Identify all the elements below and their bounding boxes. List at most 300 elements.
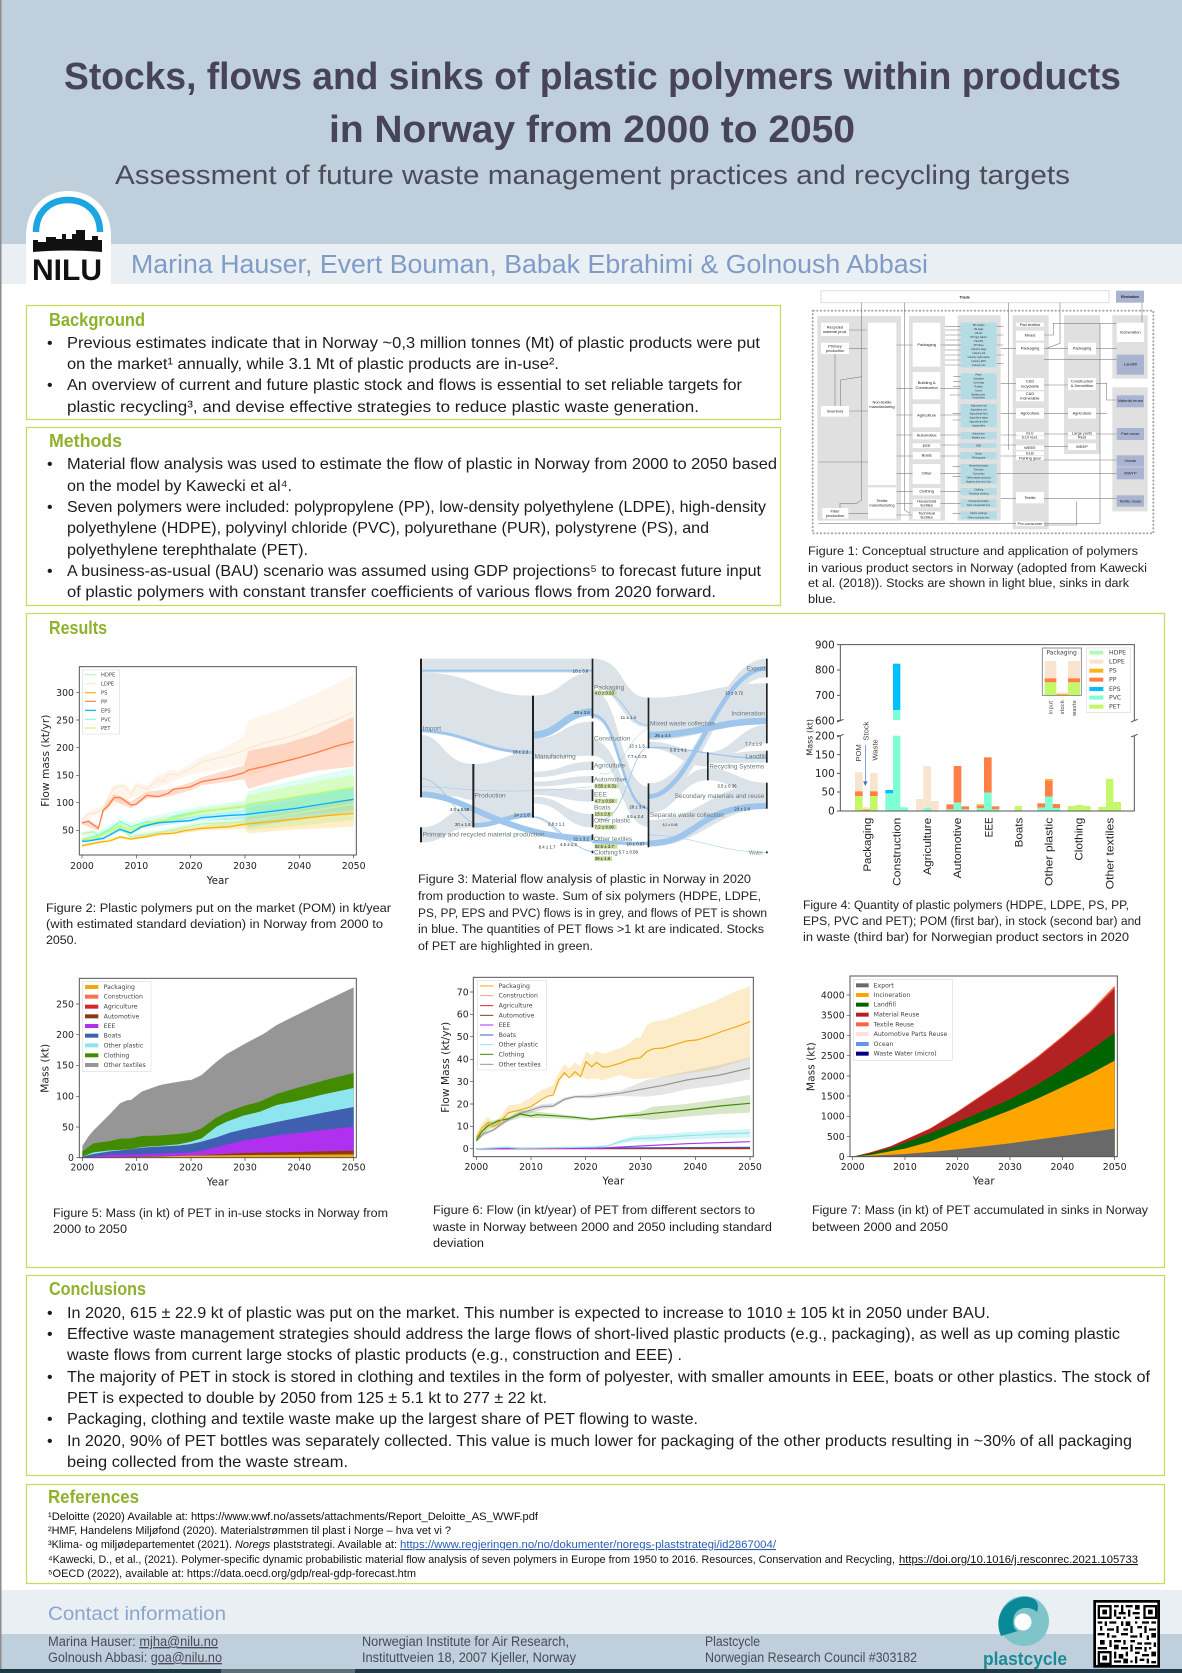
authors: Marina Hauser, Evert Bouman, Babak Ebrahimi & Golnoush Abbasi (131, 251, 928, 279)
chart: figure 2 polymer flow lines: 50 (62, 826, 74, 837)
icon: QR code (1093, 1600, 1160, 1668)
caption: figure 5 (53, 1206, 388, 1236)
heading: references: References (48, 1486, 139, 1507)
figure 1: conceptual structure diagram: Mixed (1025, 333, 1035, 338)
sector axis labels: Construction (892, 818, 904, 886)
sector axis labels: Packaging (862, 818, 874, 872)
figure 1: conceptual structure diagram: Industry foil (972, 352, 985, 355)
chart: figure 2 polymer flow lines: 200 (56, 743, 74, 754)
text block: conclusions bullets: Effective waste management strategies should address the large flows of short-lived plastic products (e.g., packaging), as well as up coming plastic (67, 1326, 1120, 1343)
text block: methods bullets: polyethylene terephthalate (PET). (67, 542, 308, 559)
text block: reference list: ¹Deloitte (2020) Available at: https://www.wwf.no/assets/attachments/Report_Deloitte_AS_WWF.pdf (48, 1511, 539, 1523)
figure 1: conceptual structure diagram: Agrotextiles (972, 425, 986, 428)
legend: figure 4: PET (1109, 704, 1121, 711)
chart: figure 3 sankey diagram: Construction (594, 736, 631, 743)
caption: figure 1: in various product sectors in Norway (adopted from Kawecki (808, 561, 1147, 575)
inset: packaging bars: input (1049, 701, 1055, 714)
chart: figure 5 stacked area: Year (206, 1176, 229, 1188)
chart: figure 4 bar chart: 600 (815, 715, 835, 727)
heading: conclusions: Conclusions (49, 1278, 146, 1299)
figure 1: conceptual structure diagram: PP textiles (973, 324, 985, 327)
annotation: POM, stock and waste bars: POM (854, 744, 863, 762)
chart: figure 5 stacked area: 100 (56, 1092, 74, 1103)
legend: figure 2: PET (101, 726, 111, 732)
figure 1: conceptual structure diagram: Building & (918, 380, 936, 385)
chart: figure 3 sankey diagram: 7.7 ± 1.9 (745, 741, 762, 746)
figure 1: conceptual structure diagram: Geotextiles (972, 397, 986, 400)
text block: institute address: Norwegian Institute for Air Research, (362, 1634, 569, 1649)
chart: figure 6 PET waste flows: 2020 (574, 1162, 598, 1173)
legend: figure 4: EPS (1109, 686, 1121, 693)
caption: figure 5: Figure 5: Mass (in kt) of PET in in-use stocks in Norway from (53, 1206, 388, 1220)
legend: figure 7: Export (874, 982, 894, 989)
figure 1: conceptual structure diagram: textiles (920, 514, 933, 519)
chart: figure 3 sankey diagram: 20 ± 1.8 (455, 822, 471, 827)
chart: figure 3 sankey diagram: Water (749, 850, 763, 856)
chart: figure 7 PET sinks stacked area: 1500 (821, 1091, 845, 1102)
figure 1: conceptual structure diagram: Incineration (1120, 330, 1141, 335)
figure 1: conceptual structure diagram: Packaging (1073, 346, 1091, 351)
text block: reference list: ³Klima- og miljødepartementet (2021). Noregs plaststrategi. Available at: (48, 1539, 397, 1551)
chart: figure 3 sankey diagram: 4.7 ± 0.58 (595, 799, 614, 804)
chart: figure 4 bar chart: 100 (815, 768, 835, 780)
text block: methods bullets: of plastic polymers with constant transfer coefficients of various flows from 2020 forward. (67, 584, 716, 601)
chart: figure 6 PET waste flows: 60 (457, 1010, 469, 1021)
chart: figure 6 PET waste flows (439, 977, 762, 1187)
legend: figure 6: Automotive (499, 1012, 534, 1019)
chart: figure 7 PET sinks stacked area (804, 976, 1127, 1187)
chart: figure 3 sankey diagram: 4.5 ± 2.4 (627, 814, 644, 819)
panel: background (26, 306, 780, 420)
panel: conclusions (26, 1276, 1164, 1476)
text block: methods bullets: • (47, 499, 53, 516)
text block: methods bullets: • (47, 456, 53, 473)
figure 1: conceptual structure diagram: Household textiles (969, 500, 990, 503)
caption: figure 6 (432, 1203, 772, 1250)
chart: figure 3 sankey diagram: Manufacturing (535, 754, 576, 761)
sector axis labels: Agriculture (922, 818, 934, 875)
figure 1: conceptual structure diagram: Other technical text. (968, 516, 990, 519)
chart: figure 3 sankey diagram: Recycling Systems (709, 764, 765, 771)
chart: figure 7 PET sinks stacked area: 0 (839, 1152, 845, 1163)
text block: reference list: ⁵OECD (2022), available at: https://data.oecd.org/gdp/real-gdp-forecast.htm (48, 1568, 416, 1580)
caption: figure 6: deviation (433, 1236, 484, 1250)
legend: figure 2: PS (101, 691, 107, 697)
figure 1: conceptual structure diagram: Cosmetics (973, 473, 985, 476)
text block: conclusions bullets: • (47, 1369, 53, 1386)
caption: figure 1 (808, 544, 1147, 606)
title (64, 56, 1121, 151)
chart: figure 2 polymer flow lines: 2040 (287, 861, 311, 872)
chart: figure 3 sankey diagram: 24 ± 1.8 (514, 812, 530, 817)
text block: reference list: ²HMF, Handelens Miljøfond (2020). Materialstrømmen til plast i Norge – hva vet vi ? (48, 1525, 451, 1537)
text block: background bullets (47, 335, 761, 416)
chart: figure 4 bar chart: 50 (822, 787, 835, 799)
legend: figure 7: Automotive Parts Reuse (874, 1031, 947, 1038)
chart: figure 2 polymer flow lines: 250 (56, 716, 74, 727)
figure 1: conceptual structure diagram: WEEP (1076, 444, 1088, 449)
figure 1: conceptual structure diagram: C&D (1026, 391, 1034, 396)
caption: figure 2: 2050. (46, 933, 77, 947)
text block: methods bullets: Material flow analysis was used to estimate the flow of plastic in Norway from 2000 to 2050 based (67, 456, 777, 473)
chart: figure 6 PET waste flows: 2010 (519, 1162, 543, 1173)
chart: figure 6 PET waste flows: Year (601, 1175, 625, 1187)
chart: figure 3 sankey diagram: Incineration (731, 711, 765, 718)
figure 1: conceptual structure diagram: Household (917, 499, 936, 504)
chart: figure 2 polymer flow lines: 2050 (342, 861, 366, 872)
inset: packaging bars (1042, 648, 1081, 716)
chart: figure 7 PET sinks stacked area: 2040 (1050, 1162, 1074, 1173)
text block: methods bullets: Seven polymers were included: polypropylene (PP), low-density polyethylene (LDPE), high-density (67, 499, 766, 516)
figure 1: conceptual structure diagram: EEE (976, 445, 981, 448)
chart: figure 7 PET sinks stacked area: Mass (kt) (804, 1042, 817, 1091)
chart: figure 5 stacked area: 0 (68, 1153, 74, 1164)
figure 1: conceptual structure diagram: PE bags (974, 328, 984, 331)
figure 1: conceptual structure diagram: Fishing gear (972, 457, 986, 460)
legend: figure 2: LDPE (101, 682, 114, 688)
figure 1: conceptual structure diagram: Industry mix (972, 364, 986, 367)
caption: figure 3: PS, PP, EPS and PVC) flows is in grey, and flows of PET is shown (418, 906, 767, 920)
caption: figure 3 (418, 872, 767, 953)
chart: figure 4 bar chart: 0 (828, 806, 835, 818)
legend: figure 5: Automotive (104, 1013, 139, 1020)
caption: figure 6: waste in Norway between 2000 and 2050 including standard (432, 1220, 772, 1234)
chart: figure 3 sankey diagram: 28 ± 3.4 (629, 804, 646, 809)
legend: figure 4: PS (1109, 668, 1117, 675)
figure 1: conceptual structure diagram: Construction (915, 385, 938, 390)
figure 1: conceptual structure diagram: production (826, 513, 844, 518)
figure 1: conceptual structure diagram: Packaging (917, 342, 936, 347)
figure 1: conceptual structure diagram: Non-textile (872, 399, 892, 404)
chart: figure 2 polymer flow lines (39, 667, 366, 887)
chart: figure 2 polymer flow lines: 300 (56, 688, 74, 699)
chart: figure 5 stacked area: 200 (56, 1030, 74, 1041)
text block: background bullets: An overview of current and future plastic stock and flows is essential to set reliable targets for (67, 377, 743, 394)
chart: figure 3 sankey diagram: 82.5 ± 3.7 (595, 844, 614, 849)
chart: figure 3 sankey diagram: 8.1 ± 0.45 (663, 823, 678, 827)
chart: figure 5 stacked area: 2050 (342, 1163, 366, 1174)
text block: conclusions bullets: In 2020, 90% of PET bottles was separately collected. This value is much lower for packaging of the other products resulting in ~30% of all packaging (67, 1433, 1132, 1450)
chart: figure 6 PET waste flows: 40 (457, 1055, 469, 1066)
chart: figure 6 PET waste flows: 30 (457, 1077, 469, 1088)
figure 1: conceptual structure diagram: textiles (920, 502, 933, 507)
title: Stocks, flows and sinks of plastic polymers within products (64, 56, 1121, 98)
chart: figure 6 PET waste flows: 70 (457, 987, 469, 998)
figure 1: conceptual structure diagram: Industry bags (971, 348, 987, 351)
icon: plastcycle logo (983, 1596, 1067, 1669)
caption: figure 7: between 2000 and 2050 (812, 1220, 948, 1234)
caption: figure 7 (812, 1203, 1149, 1234)
figure 1: conceptual structure diagram: Rest (1078, 435, 1087, 440)
text block: institute address: Instituttveien 18, 2007 Kjeller, Norway (362, 1650, 576, 1665)
text block: conclusions bullets: • (47, 1326, 53, 1343)
chart: figure 4 bar chart: 800 (815, 665, 835, 677)
chart: figure 5 stacked area: 2030 (233, 1163, 257, 1174)
legend: figure 5: EEE (104, 1023, 115, 1030)
legend: figure 6: Other textiles (499, 1061, 541, 1068)
figure 1: conceptual structure diagram: Large parts (1072, 431, 1092, 436)
chart: figure 6 PET waste flows: 50 (457, 1032, 469, 1043)
chart: figure 3 sankey diagram: Other plastic (594, 817, 631, 824)
text block: conclusions bullets: • (47, 1305, 53, 1322)
legend: figure 7: Waste Water (micro) (874, 1051, 937, 1058)
legend: figure 5: Boats (104, 1033, 121, 1040)
legend: figure 5: Clothing (104, 1052, 129, 1059)
chart: figure 3 sankey diagram: 21 ± 3.2 (573, 836, 590, 841)
panel: references (26, 1484, 1164, 1584)
text block: conclusions bullets: Packaging, clothing and textile waste make up the largest share of PET flowing to waste. (67, 1411, 698, 1428)
figure 1: conceptual structure diagram (813, 291, 1153, 533)
figure 1: conceptual structure diagram: Hygiene and med. text. (966, 481, 992, 484)
text block: methods bullets: on the model by Kawecki et al⁴. (67, 478, 292, 495)
figure 1: conceptual structure diagram: Furniture (974, 469, 984, 472)
legend: figure 7: Material Reuse (874, 1012, 920, 1019)
chart: figure 3 sankey diagram: 29 ± 3.6 (574, 710, 590, 715)
legend: figure 4: HDPE (1109, 650, 1126, 657)
chart: figure 4 bar chart: 900 (815, 639, 835, 651)
figure 1: conceptual structure diagram: Ocean (1124, 458, 1136, 463)
text block: contact names: Golnoush Abbasi: goa@nilu.no (48, 1650, 222, 1665)
text block: reference list: https://doi.org/10.1016/j.resconrec.2021.105733 (899, 1554, 1138, 1566)
figure 1: conceptual structure diagram: Boats (975, 453, 983, 456)
chart: figure 3 sankey diagram: 4.0 ± 0.53 (595, 691, 614, 696)
chart: figure 3 sankey diagram: Import (423, 726, 441, 733)
icon: plastcycle logo: plastcycle (983, 1648, 1067, 1669)
caption: figure 3: Figure 3: Material flow analysis of plastic in Norway in 2020 (418, 872, 751, 886)
chart: figure 7 PET sinks stacked area: 500 (827, 1132, 845, 1143)
text block: institute address (362, 1634, 576, 1665)
chart: figure 4 bar chart (806, 639, 1138, 889)
text block: background bullets: on the market¹ annually, while 3.1 Mt of plastic products are in-use². (67, 356, 559, 373)
figure 1: conceptual structure diagram: Agriculture pipes (969, 417, 989, 420)
chart: figure 3 sankey diagram: 5.7 ± 0.58 (619, 849, 638, 854)
chart: figure 3 sankey diagram: Export (747, 665, 766, 672)
chart: figure 3 sankey diagram: Secondary materials and reuse (675, 793, 765, 800)
sector axis labels (862, 817, 1116, 889)
chart: figure 3 sankey diagram: Production (475, 793, 506, 800)
chart: figure 3 sankey diagram (420, 659, 768, 861)
legend: figure 5: Agriculture (104, 1004, 138, 1011)
figure 1: conceptual structure diagram: WWTP (1124, 470, 1137, 475)
sector axis labels: EEE (983, 817, 995, 837)
legend: figure 7: Incineration (874, 992, 910, 999)
legend: figure 5 (82, 982, 151, 1072)
figure 1: conceptual structure diagram: Household plastic (969, 465, 989, 468)
chart: figure 5 stacked area: 150 (56, 1061, 74, 1072)
figure 1: conceptual structure diagram: Industry rigid plastic (968, 356, 990, 359)
caption: figure 4: in waste (third bar) for Norwegian product sectors in 2020 (803, 930, 1129, 944)
chart: figure 7 PET sinks stacked area: 2020 (945, 1162, 969, 1173)
figure 1: conceptual structure diagram: Fiber (830, 509, 840, 514)
chart: figure 3 sankey diagram: Agriculture (594, 763, 625, 770)
text block: methods bullets: polyethylene (HDPE), polyvinyl chloride (PVC), polyurethane (PUR), polystyrene (PS), and (67, 520, 709, 537)
figure 1: conceptual structure diagram: Recycled (827, 324, 843, 329)
legend: figure 6: Agriculture (499, 1003, 533, 1010)
chart: figure 3 sankey diagram: 10 ± 3.8 (573, 668, 589, 673)
legend: figure 5: Construction (104, 994, 143, 1001)
sector axis labels: Other textiles (1104, 817, 1116, 889)
chart: figure 3 sankey diagram: Automotive (594, 776, 627, 783)
text block: funding: Plastcycle (705, 1634, 760, 1649)
legend: figure 2 (82, 670, 119, 734)
text block: conclusions bullets: The majority of PET in stock is stored in clothing and textiles in the form of polyester, with smaller amounts in EEE, boats or other plastics. The stock of (67, 1369, 1151, 1386)
chart: figure 7 PET sinks stacked area: 3500 (821, 1011, 845, 1022)
heading: methods: Methods (49, 430, 122, 451)
sector axis labels: Automotive (952, 818, 964, 878)
figure 1: conceptual structure diagram: Liners (975, 389, 983, 392)
caption: figure 1: Figure 1: Conceptual structure and application of polymers (808, 544, 1138, 558)
text block: reference list: ⁴Kawecki, D., et al., (2021). Polymer-specific dynamic probabilistic material flow analysis of seven polymers in Europe from 1950 to 2016. Resources, Conservation and Recycling, (48, 1554, 895, 1566)
chart: figure 3 sankey diagram: Boats (594, 804, 611, 811)
caption: figure 2: (with estimated standard deviation) in Norway from 2000 to (46, 917, 383, 931)
figure 1: conceptual structure diagram: Fabric coatings (970, 512, 988, 515)
figure 1: conceptual structure diagram: Agriculture (917, 413, 937, 418)
chart: figure 2 polymer flow lines: Year (206, 875, 229, 887)
panel: results (26, 614, 1164, 1268)
text block: background bullets: Previous estimates indicate that in Norway ~0,3 million tonnes (Mt) of plastic products were put (67, 335, 761, 352)
figure 1: conceptual structure diagram: Inventory (827, 409, 843, 414)
text block: funding (705, 1634, 917, 1665)
chart: figure 5 stacked area: 250 (56, 999, 74, 1010)
sector axis labels: Boats (1013, 817, 1025, 847)
legend: figure 6: Other plastic (499, 1042, 538, 1049)
figure 1: conceptual structure diagram: Textile (1024, 495, 1036, 500)
footer bands (0, 1590, 1182, 1673)
figure 1: conceptual structure diagram: Trade (959, 294, 971, 299)
title: in Norway from 2000 to 2050 (329, 109, 855, 151)
chart: figure 3 sankey diagram: 23 ± 2.8 (734, 806, 751, 811)
chart: figure 3 sankey diagram: 10 ± 0.67 (627, 841, 645, 846)
text block: conclusions bullets (47, 1305, 1151, 1471)
chart: figure 3 sankey diagram: 4.5 ± 1.3 (560, 842, 577, 847)
caption: figure 3: from production to waste. Sum of six polymers (HDPE, LDPE, (418, 889, 761, 903)
figure 1: conceptual structure diagram: ELV text. (1022, 435, 1038, 440)
figure 1: conceptual structure diagram: C&D (1026, 378, 1034, 383)
sector axis labels: Other plastic (1043, 817, 1055, 886)
caption: figure 3: of PET are highlighted in green. (418, 939, 593, 953)
figure 1: conceptual structure diagram: Technical clothing (969, 493, 989, 496)
chart: figure 3 sankey diagram: 0.55 ± 0.31 (595, 783, 617, 788)
text block: conclusions bullets: • (47, 1433, 53, 1450)
text block: background bullets: plastic recycling³, and devise effective strategies to reduce plastic waste generation. (67, 399, 699, 416)
text block: conclusions bullets: being collected from the waste stream. (67, 1454, 348, 1471)
text block: methods bullets (47, 456, 777, 601)
subtitle: Assessment of future waste management practices and recycling targets (115, 160, 1070, 190)
chart: figure 4 bar chart: 200 (815, 730, 835, 742)
annotation: POM, stock and waste bars: Stock (862, 721, 871, 741)
chart: figure 7 PET sinks stacked area: 2050 (1103, 1162, 1127, 1173)
figure 1: conceptual structure diagram: Clothing (974, 489, 984, 492)
chart: figure 6 PET waste flows: 10 (457, 1122, 469, 1133)
inset: packaging bars: Packaging (1046, 650, 1077, 657)
figure 1: conceptual structure diagram: Tech. household text. (967, 504, 991, 507)
icon: NILU logo: NILU (32, 254, 102, 287)
text block: conclusions bullets: • (47, 1411, 53, 1428)
legend: figure 7 (853, 979, 952, 1060)
chart: figure 3 sankey diagram: Primary and recycled material production (423, 832, 545, 839)
figure 1: conceptual structure diagram: Agriculture (1072, 411, 1092, 416)
chart: figure 7 PET sinks stacked area: 4000 (821, 990, 845, 1001)
legend: figure 5: Packaging (104, 984, 135, 991)
chart: figure 3 sankey diagram: 13 ± 2.6 (595, 812, 611, 817)
legend: figure 2: EPS (101, 708, 111, 714)
figure 1: conceptual structure diagram: Automotive (972, 433, 985, 436)
chart: figure 2 polymer flow lines: 2020 (179, 861, 203, 872)
panel: methods (26, 428, 780, 606)
text block: reference list: https://www.regjeringen.no/no/dokumenter/noregs-plaststrategi/id2867004/ (400, 1539, 777, 1551)
figure 1: conceptual structure diagram: ELV (1026, 431, 1034, 436)
chart: figure 3 sankey diagram: 3.5 ± 0.36 (717, 783, 737, 788)
legend: figure 2: PP (101, 699, 107, 705)
legend: figure 5: Other textiles (104, 1062, 146, 1069)
chart: figure 3 sankey diagram: 11 ± 1.4 (621, 715, 637, 720)
legend: figure 4: PVC (1109, 695, 1121, 702)
figure 1: conceptual structure diagram: Packaging (1021, 346, 1039, 351)
figure 1: conceptual structure diagram: incinerable (1020, 396, 1040, 401)
icon: NILU logo (26, 191, 111, 287)
figure 1: conceptual structure diagram: PP fibres (974, 344, 984, 347)
caption: figure 6: Figure 6: Flow (in kt/year) of PET from different sectors to (433, 1203, 755, 1217)
figure 1: conceptual structure diagram: Pipes (976, 373, 983, 376)
chart: figure 6 PET waste flows: 0 (463, 1144, 469, 1155)
figure 1: conceptual structure diagram: Construction (1071, 378, 1093, 383)
figure 1: conceptual structure diagram: Coverings (973, 381, 985, 384)
chart: figure 6 PET waste flows: 2040 (683, 1162, 707, 1173)
figure 1: conceptual structure diagram: recyclable (1021, 383, 1040, 388)
figure 1: conceptual structure diagram: ELB (1026, 451, 1034, 456)
text block: reference list (48, 1511, 1138, 1580)
figure 1: conceptual structure diagram: Elimination (1121, 295, 1139, 299)
figure 1: conceptual structure diagram: Automotive (917, 433, 937, 438)
legend: figure 4: LDPE (1109, 659, 1125, 666)
heading: results: Results (49, 617, 107, 638)
figure 1: conceptual structure diagram: Insulation (973, 377, 985, 380)
chart: figure 3 sankey diagram: 13 ± 0.72 (725, 690, 744, 695)
chart: figure 6 PET waste flows: Flow Mass (kt/yr) (439, 1022, 452, 1113)
caption: figure 4: Figure 4: Quantity of plastic polymers (HDPE, LDPE, PS, PP, (803, 898, 1129, 912)
chart: figure 2 polymer flow lines: 150 (56, 771, 74, 782)
figure 1: conceptual structure diagram: WEEE (1024, 445, 1036, 450)
chart: figure 5 stacked area (38, 978, 366, 1188)
chart: figure 5 stacked area: 2010 (125, 1163, 149, 1174)
text block: contact names: Marina Hauser: mjha@nilu.no (48, 1634, 218, 1649)
chart: figure 3 sankey diagram: 26 ± 4.4 (655, 733, 671, 738)
chart: figure 4 bar chart: Mass (kt) (806, 719, 815, 756)
chart: figure 3 sankey diagram: 13 ± 1.3 (629, 744, 645, 749)
chart: figure 3 sankey diagram: EEE (594, 792, 608, 799)
chart: figure 4 bar chart: 150 (815, 749, 835, 761)
chart: figure 3 sankey diagram: 6.9 ± 4.1 (670, 747, 687, 752)
figure 1: conceptual structure diagram: Mobility text. (972, 437, 986, 440)
text block: conclusions bullets: PET is expected to double by 2050 from 125 ± 5.1 kt to 277 ± 22 kt. (67, 1390, 547, 1407)
figure 1: conceptual structure diagram: Agriculture (1020, 411, 1040, 416)
chart: figure 5 stacked area: 2000 (70, 1163, 94, 1174)
figure 1: conceptual structure diagram: Profiles (975, 385, 984, 388)
caption: figure 3: in blue. The quantities of PET flows >1 kt are indicated. Stocks (418, 922, 764, 936)
chart: figure 3 sankey diagram: 39 ± 1.6 (595, 856, 611, 861)
legend: figure 2: PVC (101, 717, 112, 723)
legend: figure 6: Boats (499, 1032, 516, 1039)
legend: figure 4 (1086, 648, 1131, 713)
chart: figure 6 PET waste flows: 2000 (464, 1162, 488, 1173)
figure 1: conceptual structure diagram: Agriculture mix (970, 409, 988, 412)
chart: figure 2 polymer flow lines: 2030 (233, 861, 257, 872)
inset: packaging bars: waste (1072, 700, 1078, 716)
legend: figure 6: Packaging (499, 983, 530, 990)
caption: figure 1: et al. (2018)). Stocks are shown in light blue, sinks in dark (808, 576, 1130, 590)
figure 1: conceptual structure diagram: Pad textiles (1020, 322, 1040, 327)
caption: figure 1: blue. (808, 592, 836, 606)
